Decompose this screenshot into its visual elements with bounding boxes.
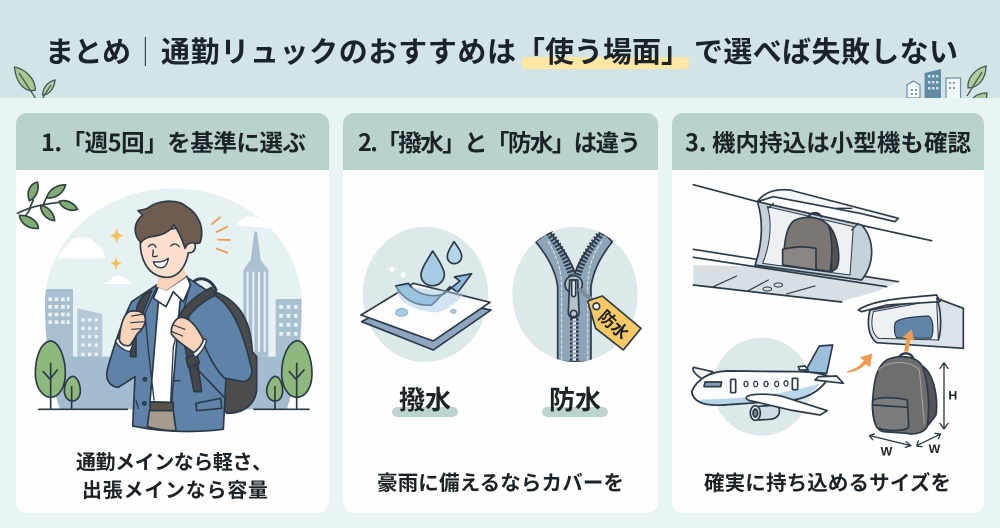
icon: branch xyxy=(17,182,78,228)
size labels: W xyxy=(881,444,893,458)
panel heading 3: 3. 機内持込は小型機も確認 xyxy=(685,124,972,158)
panel: 週5回 xyxy=(16,113,329,513)
size labels: H xyxy=(948,388,957,402)
panel: 撥水と防水 xyxy=(343,113,658,513)
panel heading 2: 2.「撥水」と「防水」は違う xyxy=(358,124,641,158)
panel heading 3 xyxy=(672,113,984,170)
ground xyxy=(39,407,309,412)
panel: 機内持込 xyxy=(672,113,984,513)
title: 「使う場面」 xyxy=(516,29,690,71)
panel heading 2 xyxy=(343,113,658,170)
icon: repellent fabric xyxy=(361,227,491,362)
man: backpack xyxy=(192,279,257,413)
size labels xyxy=(881,388,957,458)
tag text: 防水 xyxy=(594,304,635,344)
title: 通勤リュックのおすすめは xyxy=(161,29,516,71)
panel text 1 xyxy=(76,446,272,503)
man: straps xyxy=(131,287,227,400)
title xyxy=(45,29,958,71)
icon: zipper xyxy=(512,227,641,362)
size labels: W xyxy=(929,442,941,456)
icon: header city and leaves right xyxy=(906,65,988,98)
panel heading 1: 1.「週5回」を基準に選ぶ xyxy=(41,124,306,158)
illustration: 撥水 and 防水 xyxy=(361,227,641,362)
arrows xyxy=(847,329,914,373)
panel text 1: 出張メインなら容量 xyxy=(82,474,268,503)
illustration: cabin and backpack xyxy=(692,185,963,458)
panel text 1: 通勤メインなら軽さ、 xyxy=(76,446,272,475)
title: まとめ xyxy=(45,29,131,71)
title highlight xyxy=(522,57,689,69)
illustration: commuter with backpack xyxy=(17,182,312,432)
icon: header leaves left xyxy=(14,67,55,99)
label 撥水: 撥水 xyxy=(399,380,451,417)
icon: shine lines xyxy=(212,217,230,253)
panel text 3: 確実に持ち込めるサイズを xyxy=(704,466,951,496)
man: head xyxy=(135,201,202,291)
icon: overhead bin with backpack xyxy=(693,185,932,302)
icon: airplane xyxy=(692,338,843,436)
panel heading 1 xyxy=(16,113,329,170)
title: で選べば失敗しない xyxy=(694,29,958,71)
trees xyxy=(35,341,312,409)
label 防水: 防水 xyxy=(549,380,601,417)
header band xyxy=(0,0,1000,98)
man: jacket xyxy=(107,276,252,432)
icon: sparkles xyxy=(110,228,123,270)
icon: backpack with size arrows xyxy=(869,353,948,447)
backdrop: city xyxy=(43,187,303,413)
man: hands xyxy=(115,311,207,357)
panel text 2: 豪雨に備えるならカバーを xyxy=(377,466,624,496)
icon: small bin xyxy=(858,295,963,348)
